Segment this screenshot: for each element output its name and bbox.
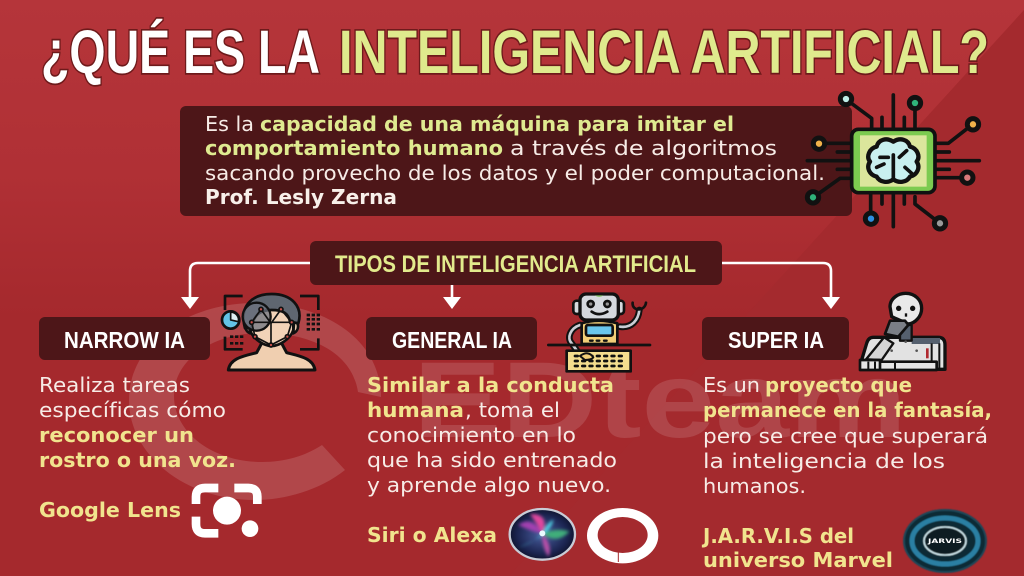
title [41, 18, 989, 86]
text: general IA description [367, 373, 617, 497]
text: general IA description: conocimiento en lo [367, 423, 576, 447]
text: narrow IA description: Realiza tareas [39, 373, 190, 397]
icon: JARVIS: JARVIS [927, 538, 962, 545]
text: narrow IA description: reconocer un [39, 423, 194, 447]
icon: AI chip with brain [807, 93, 979, 229]
arrow: to super IA [722, 263, 840, 309]
text: super IA description: proyecto que [765, 373, 912, 397]
text: narrow IA description [39, 373, 236, 472]
watermark: EDteam logo: EDteam [413, 339, 907, 460]
text: general IA description: y aprende algo nuevo. [367, 473, 611, 497]
arrow: to general IA [443, 285, 461, 309]
icon: Siri [510, 509, 575, 560]
arrow: to narrow IA [181, 263, 310, 309]
panel: super IA label [702, 317, 849, 360]
text: JARVIS: universo Marvel [703, 548, 893, 572]
text: super IA description: permanece en la fantasía, [703, 398, 992, 422]
text: narrow IA description: específicas cómo [39, 398, 226, 422]
text: narrow IA description: rostro o una voz. [39, 448, 236, 472]
text: super IA description: pero se cree que superará [703, 424, 988, 448]
panel: definition: a través de algoritmos [510, 136, 777, 160]
panel: super IA label: SUPER IA [728, 327, 824, 353]
text: general IA description: que ha sido entrenado [367, 448, 617, 472]
panel: general IA label: GENERAL IA [392, 327, 512, 353]
icon: Alexa [587, 508, 658, 563]
icon: face recognition [222, 294, 322, 370]
watermark: EDteam logo [129, 303, 907, 500]
text: Google Lens: Google Lens [39, 498, 181, 522]
text: Siri o Alexa: Siri o Alexa [367, 523, 497, 547]
panel: definition: Prof. Lesly Zerna [205, 185, 397, 209]
panel: narrow IA label [39, 317, 210, 360]
text: general IA description: , toma el [465, 398, 560, 422]
text: general IA description: humana [367, 398, 464, 422]
text: general IA description: Similar a la conducta [367, 373, 614, 397]
heading: types of AI [310, 241, 722, 285]
icon: robot at keyboard [548, 294, 650, 371]
heading: types of AI: TIPOS DE INTELIGENCIA ARTIFICIAL [335, 251, 696, 278]
icon: thinking android [860, 293, 945, 370]
panel: definition: comportamiento humano [205, 136, 503, 160]
icon: JARVIS [904, 510, 986, 572]
text: super IA description: Es un [703, 373, 760, 397]
panel: definition: capacidad de una máquina para imitar el [260, 112, 734, 136]
text: super IA description: humanos. [703, 474, 806, 498]
panel: definition: Es la [205, 112, 254, 136]
text: super IA description: la inteligencia de los [703, 449, 945, 473]
text: JARVIS [701, 524, 893, 572]
title: ¿QUÉ ES LA [41, 18, 320, 86]
text: super IA description [703, 373, 992, 498]
panel: narrow IA label: NARROW IA [64, 327, 185, 353]
text: JARVIS: J.A.R.V.I.S del [701, 524, 854, 548]
panel: definition: sacando provecho de los datos y el poder computacional. [205, 161, 825, 185]
panel: definition [180, 106, 852, 216]
panel: general IA label [366, 317, 537, 360]
icon: Google Lens [196, 488, 258, 537]
